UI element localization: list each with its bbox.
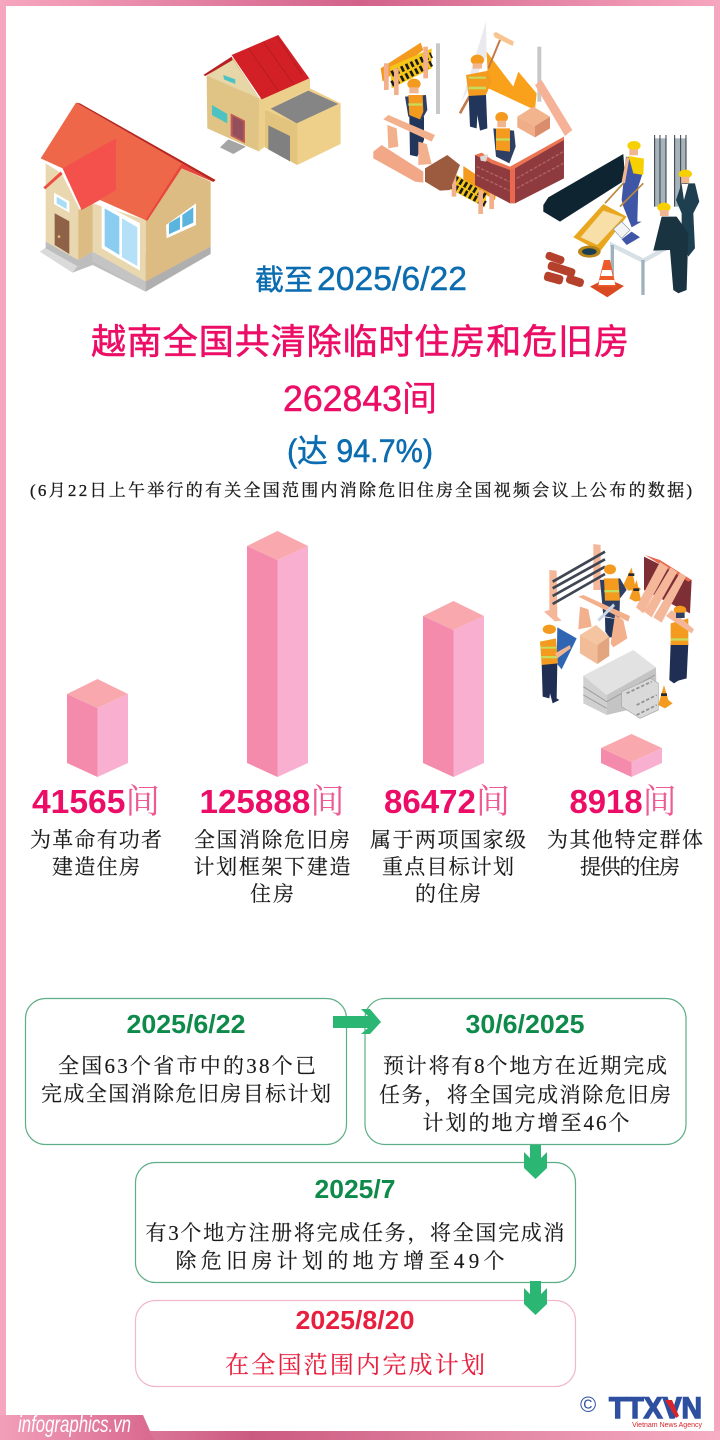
icon: worker carrying plank xyxy=(666,606,694,683)
icon: cones xyxy=(623,567,673,708)
icon: rebar columns xyxy=(654,135,687,207)
label: 的住房 xyxy=(415,882,481,906)
icon: table and laptop xyxy=(610,222,670,295)
panel: 30/6/2025: 计划的地方增至46个 xyxy=(422,1111,630,1135)
bar: 86472 xyxy=(423,601,484,777)
icon: traffic cone xyxy=(590,260,624,297)
panel: 30/6/2025: 30/6/2025 xyxy=(466,1009,584,1039)
label: 为革命有功者 xyxy=(30,828,162,852)
value: 41565 units xyxy=(30,783,162,879)
arrow: down 1 xyxy=(524,1145,547,1179)
panel: 2025/6/22: 全国63个省市中的38个已 xyxy=(58,1054,316,1078)
icon: stacked bricks and planks xyxy=(636,555,692,623)
icon: worker sawing xyxy=(578,564,630,647)
illustration: workers with planks and concrete blocks xyxy=(540,544,694,718)
bar: 41565 xyxy=(67,679,128,777)
icon: worker at saw bench xyxy=(373,79,435,183)
total figure: 262843 xyxy=(283,378,402,419)
icon: painted wall and roller xyxy=(436,22,541,114)
label: 为其他特定群体 xyxy=(547,828,703,852)
icon: worker in overalls xyxy=(622,141,644,227)
icon: barricades xyxy=(381,43,497,214)
icon: fence with rebar xyxy=(544,544,605,621)
date heading: 2025/6/22 xyxy=(317,260,467,297)
value: 125888 units xyxy=(194,783,350,906)
bar: 8918 xyxy=(601,734,662,777)
logo: TTXVN: TTXVN xyxy=(609,1392,702,1425)
label: 计划框架下建造 xyxy=(194,855,350,879)
date heading: 截至 xyxy=(255,264,313,297)
illustration: construction workers building a brick wall xyxy=(373,22,699,297)
bar: 125888 xyxy=(247,531,308,777)
label: 建造住房 xyxy=(52,855,140,879)
panel: 2025/7: 有3个地方注册将完成任务，将全国完成消 xyxy=(146,1221,564,1246)
panel: 30/6/2025: 任务，将全国完成消除危旧房 xyxy=(379,1083,671,1108)
panel: 2025/7: 2025/7 xyxy=(314,1174,396,1204)
icon: black pipe xyxy=(543,154,625,222)
source note: (6月22日上午举行的有关全国范围内消除危旧住房全国视频会议上公布的数据) xyxy=(30,481,692,500)
logo: TTXVN: Vietnam News Agency xyxy=(632,1422,702,1429)
panel: 2025/8/20: 2025/8/20 xyxy=(296,1305,414,1335)
value: 86472 units xyxy=(370,783,526,906)
label xyxy=(370,828,526,906)
label xyxy=(194,828,350,906)
label: 住房 xyxy=(250,882,294,906)
panel: 30/6/2025: 预计将有8个地方在近期完成 xyxy=(383,1054,667,1078)
label xyxy=(30,828,162,879)
icon: wheelbarrow of sand xyxy=(573,183,643,258)
main title: 越南全国共清除临时住房和危旧房 xyxy=(91,323,629,362)
panel: 2025/7 xyxy=(136,1162,576,1282)
icon: cement sacks xyxy=(425,155,460,191)
label: 全国消除危旧房 xyxy=(194,828,350,852)
icon: brick wall xyxy=(475,137,564,203)
bar chart xyxy=(67,531,662,777)
logo: TTXVN: © xyxy=(580,1392,596,1417)
value: 8918 units xyxy=(547,783,703,879)
icon: large house with orange roof xyxy=(40,103,216,292)
panel: 2025/7: 除危旧房计划的地方增至49个 xyxy=(176,1249,504,1273)
label: 重点目标计划 xyxy=(382,855,514,879)
percentage: (达 94.7%) xyxy=(287,433,433,469)
value: 86472 units: 86472间 xyxy=(384,783,510,821)
panel: 2025/8/20 xyxy=(136,1300,576,1386)
icon: worker laying bricks xyxy=(480,112,516,163)
total figure: 间 xyxy=(402,380,437,419)
icon: concrete block stacks xyxy=(583,650,658,718)
arrow: right xyxy=(333,1009,381,1034)
panel: 2025/6/22: 2025/6/22 xyxy=(126,1009,246,1039)
panel: 2025/8/20: 在全国范围内完成计划 xyxy=(225,1352,485,1379)
label: 属于两项国家级 xyxy=(370,828,526,852)
panel: 30/6/2025 xyxy=(365,998,686,1144)
date heading xyxy=(255,260,467,297)
icon: worker painting xyxy=(466,55,492,131)
logo: TTXVN xyxy=(580,1392,702,1429)
value: 8918 units: 8918间 xyxy=(570,783,676,821)
icon: suited supervisor front xyxy=(653,203,688,293)
value: 41565 units: 41565间 xyxy=(32,783,160,821)
label: 提供的住房 xyxy=(580,855,680,879)
icon: suited supervisor back xyxy=(676,170,699,257)
panel: 2025/6/22 xyxy=(26,998,346,1144)
value: 125888 units: 125888间 xyxy=(200,783,344,821)
icon: brick pile xyxy=(543,251,585,288)
icon: worker with blueprint xyxy=(540,625,577,703)
label xyxy=(547,828,703,879)
arrow: down 2 xyxy=(524,1281,547,1315)
panel: 2025/6/22: 完成全国消除危旧房目标计划 xyxy=(41,1082,331,1106)
footer tab: infographics.vn: infographics.vn xyxy=(18,1411,131,1437)
icon: small house with red roof xyxy=(203,35,341,165)
icon: cardboard boxes xyxy=(580,625,609,664)
icon: planks and box xyxy=(517,80,572,137)
